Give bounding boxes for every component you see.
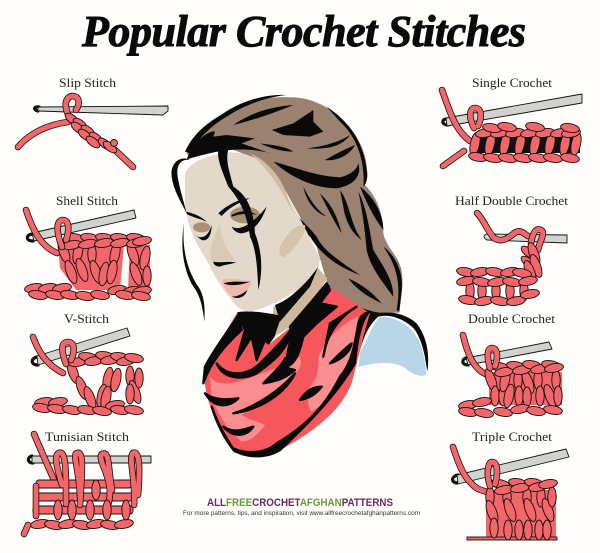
shoulder — [358, 312, 428, 376]
panel: v-stitch — [32, 312, 144, 417]
scarf — [203, 283, 370, 456]
panel: single crochet — [442, 76, 583, 166]
illustration: woman with red scarf — [171, 95, 428, 456]
panel: slip stitch — [18, 76, 168, 167]
panel: half double crochet — [455, 194, 569, 307]
label: shell stitch: Shell Stitch — [56, 194, 119, 208]
stitches — [456, 213, 544, 307]
hook — [484, 234, 567, 243]
stitches — [24, 210, 152, 302]
stitches — [458, 335, 564, 419]
stitches — [32, 337, 144, 417]
stitches — [453, 447, 558, 540]
neck — [272, 268, 327, 338]
yarn and chain — [18, 96, 133, 167]
panel: triple crochet — [453, 430, 569, 540]
hook — [443, 94, 582, 126]
hook — [32, 328, 130, 365]
label: slip stitch: Slip Stitch — [59, 76, 117, 90]
stitches — [442, 90, 583, 166]
hook — [453, 449, 569, 484]
stitches — [24, 434, 139, 534]
hook — [35, 106, 168, 115]
panel: double crochet — [458, 312, 564, 419]
title: Popular Crochet Stitches — [81, 7, 526, 56]
footer note: For more patterns, tips, and inspiration, visit www.allfreecrochetafghanpatterns.com — [183, 511, 420, 517]
label: v-stitch: V-Stitch — [64, 312, 110, 326]
label: tunisian stitch: Tunisian Stitch — [45, 430, 130, 444]
label: half double crochet: Half Double Crochet — [455, 194, 569, 208]
label: double crochet: Double Crochet — [468, 312, 556, 326]
panel: shell stitch — [24, 194, 152, 302]
panel: tunisian stitch — [24, 430, 151, 534]
face — [171, 150, 320, 322]
hook — [463, 342, 552, 365]
footer brand: ALLFREECROCHETAFGHANPATTERNS — [207, 497, 393, 509]
label: triple crochet: Triple Crochet — [472, 430, 553, 444]
hook — [27, 210, 136, 241]
hair — [185, 95, 403, 317]
hook — [28, 456, 151, 463]
label: single crochet: Single Crochet — [472, 76, 553, 90]
